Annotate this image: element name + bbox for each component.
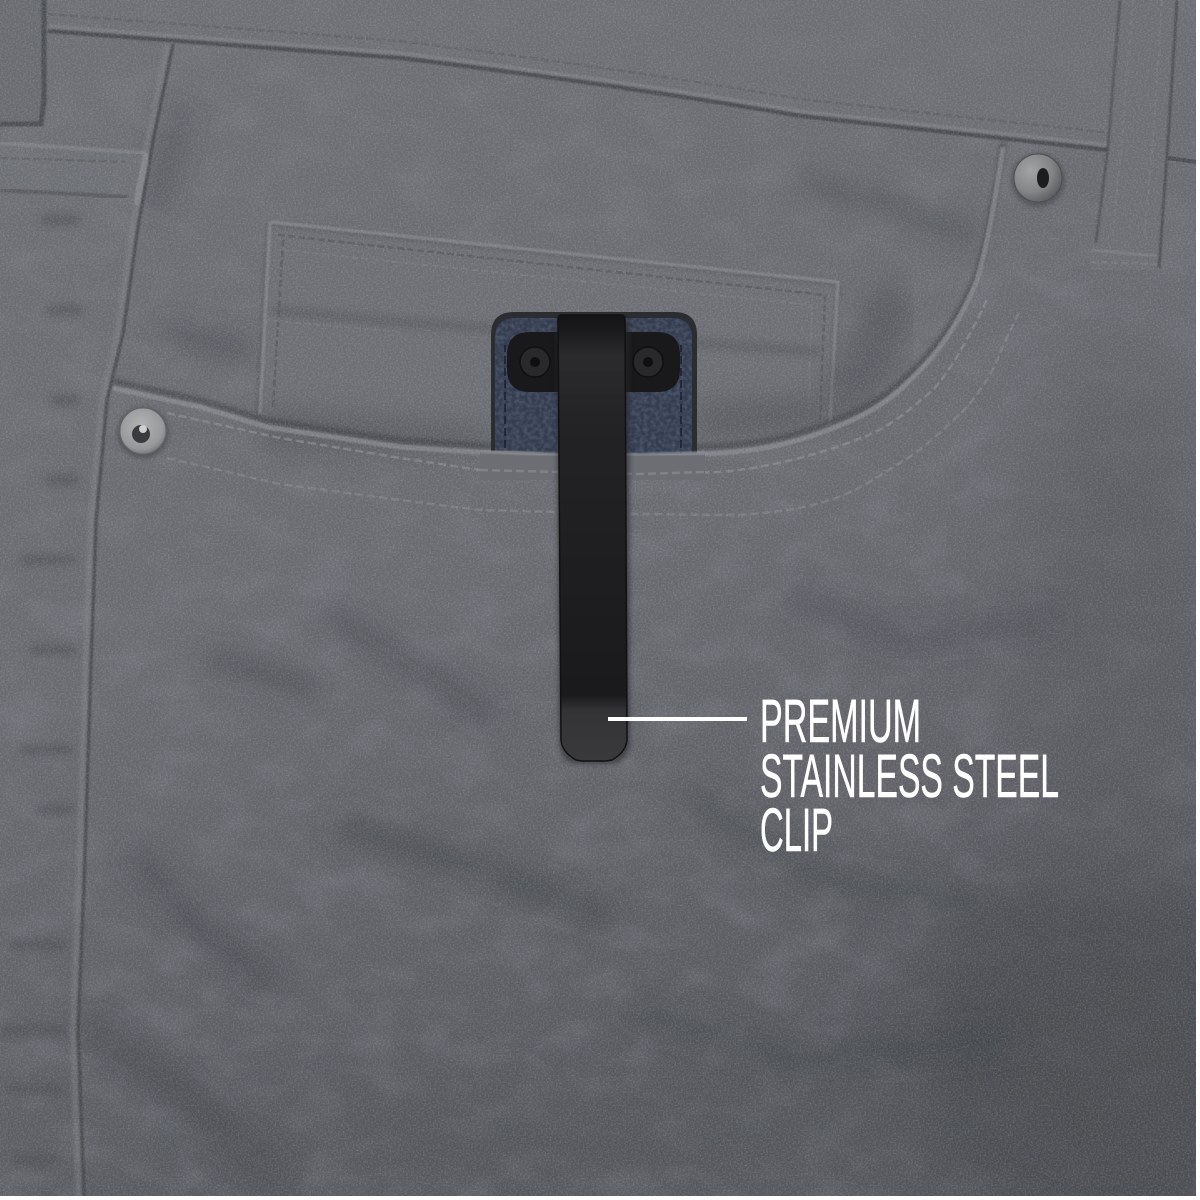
right belt loop xyxy=(1088,0,1177,272)
coin pocket xyxy=(258,221,838,460)
stainless steel clip xyxy=(556,315,630,764)
screw left xyxy=(520,347,550,377)
left belt loop xyxy=(0,0,44,124)
rivet left xyxy=(117,407,169,459)
fabric folds xyxy=(95,120,1050,1170)
callout text: PREMIUM xyxy=(760,687,921,755)
front pocket opening and stitching xyxy=(113,143,1020,515)
leather wallet xyxy=(491,312,697,460)
callout leader line xyxy=(608,717,747,721)
screw right xyxy=(633,347,663,377)
front pocket lip over wallet xyxy=(480,451,705,480)
side panel seam xyxy=(0,44,173,1200)
mounting plate xyxy=(507,332,680,392)
rivet right xyxy=(1011,153,1065,207)
left side panel blotches xyxy=(5,220,78,1160)
waistband xyxy=(48,0,1196,237)
callout text: CLIP xyxy=(760,796,833,864)
callout text xyxy=(760,687,1059,864)
